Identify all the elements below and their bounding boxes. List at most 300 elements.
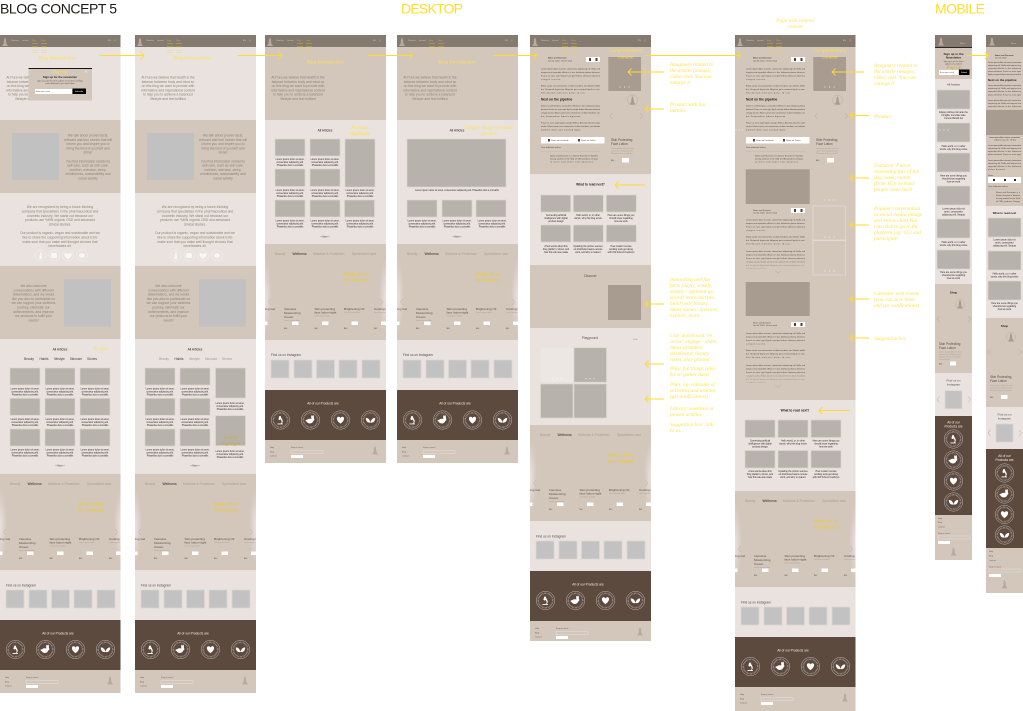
note: complementary content: Complementary [813,48,848,54]
panel: what to read next: product design [752,446,768,448]
panel: company values with social icons: Our product is organic, vegan and sustainable and we [155,231,235,235]
note: plan: Plan: my calendar of [669,381,716,388]
panel: mobile article body: Lorem ipsum dolor sit amet, consectetur [988,61,1021,64]
panel: all articles grid: consectetur adipiscing elit. [46,421,74,424]
panel: discover: Discover [584,274,598,278]
arrow: mobile 1 to 2 [967,52,988,59]
wireframe 6: article with related content: Shop [776,40,782,42]
wireframe 1: blog landing with pop up [0,35,128,693]
panel: mobile article list: Cursus blandit dui [944,117,963,120]
panel: all articles with highlights: Lorem ipsum dolor sit amet, [146,448,175,452]
wireframe 2: blog landing with highlight: lifestyle and feel fulfilled [150,97,186,101]
panel: what to read next: Updating the printer sources [573,245,603,248]
panel: all articles with product highlight: Lorem ipsum dolor sit amet, [276,189,305,192]
panel: footer: Blog [535,632,539,634]
panel: shop by category: Beauty [145,482,156,486]
wireframe 1: blog landing with pop up: EN [108,40,111,42]
wireframe 2: blog landing with highlight [128,35,263,693]
panel: shop by category: Lorem ipsum dolor [549,500,565,503]
panel: article with related content: Share on Facebook [756,140,773,142]
panel: all articles with highlights: Phasellus duis a convallis [182,425,209,427]
panel: shop by category [729,491,860,587]
panel: welcome with image: conversations with different [13,288,54,292]
panel: mobile article body: Lorem ipsum dolor sit amet, consectetur [988,159,1021,162]
panel: playground [530,328,651,425]
panel: company values with social icons: cosmetic industry. We stand out because our [162,214,229,218]
panel: mobile badges [986,449,1023,548]
panel: all articles grid: Lorem ipsum dolor sit amet, [11,388,40,390]
panel: shop by category: Moisturizing [19,541,36,545]
wireframe 3: desktop product highlight: lifestyle and feel fulfilled [280,97,316,101]
panel: about with image: nutrition, exercise, sleep, [70,168,107,172]
panel: all articles with highlights: Lorem ipsum dolor sit amet, [146,418,175,421]
panel: mobile instagram [986,407,1023,449]
panel: all articles grid: Skincare [70,357,82,361]
panel: article with related content: dui. Suspendi dignissim. Aliquam quis euismod ligula in erat. [746,88,805,91]
panel: shop by category: Lorem ipsum dolor [284,319,300,322]
panel: what to read next: Connecting artificial [750,440,771,442]
panel: shop by category: Lorem ipsum dolor [506,311,522,314]
wireframe 3: desktop product highlight: Shop [306,40,312,42]
panel: shop by category: Cooling Gel [506,307,522,311]
panel: all articles with product highlight [265,120,386,244]
panel: shop by category: $00 [580,509,583,511]
panel: newsletter pop up: Sign up for the newsletter [43,75,78,79]
wireframe 6: article with related content: Products [746,39,754,42]
panel: shop by category: Skin protecting [50,537,70,541]
panel: all articles with highlights: Phasellus duis a convallis [147,394,174,396]
panel: mobile shop: consectetur adipiscing elit. [939,353,962,356]
panel: shop by category: face lotion-night [184,540,206,544]
panel: all articles with product highlight: Phasellus duis a convallis [312,196,339,198]
note: imagery: the article (images, [670,67,711,74]
panel: shop by category: Brightening Oil [609,488,630,492]
panel: all articles with product highlight: consectetur adipiscing elit. [276,161,304,164]
note: discover: build your library. [670,301,709,307]
panel: mobile article list: Here are some things you [940,271,968,274]
panel: product values badges [735,637,856,687]
panel: all articles with product highlight: Phasellus duis a convallis [347,226,374,228]
wireframe 1: blog landing with pop up: informative and inspirational content [6,88,60,92]
panel: about with image: self-care, such as skin care, [67,164,109,168]
panel: article with related content: dictumst. Fusce ac nunc eget ligula suscipit finibus. Aenean pharetra [746,108,806,111]
panel: article with related content: Name and Surname [753,58,773,60]
panel: article body: molestie dolor, quis euismod ligula. [541,128,581,132]
panel: shop by category: Moisture & Protection [445,252,477,256]
panel: instagram: Find us on Instagram [6,584,36,588]
panel: what to read next: Hello world, or, in other [576,214,600,217]
arrow: concept 1 to 2 [100,52,144,60]
panel: shop by category: Shop all or [608,452,634,458]
panel: shop by category: face lotion-night [580,492,601,496]
panel: all articles grid: All Articles [53,348,68,352]
panel: all articles with product highlight: Highlight [348,131,370,137]
arrow: read next note 2 [819,407,850,414]
panel: shop by category: Lorem ipsum dolor [639,492,655,495]
panel: all articles grid: Lorem ipsum dolor sit amet, [46,448,75,452]
wireframe 5: article page: Shop [571,40,577,42]
note: user dashboard: room, play ground [670,357,710,363]
panel: all articles with highlights: < More > [190,464,200,468]
panel: shop by category: face lotion-night [50,540,71,544]
panel: all articles with large preview: Lorem ipsum dolor sit amet, consectetur adipiscing elit. Phasellus duis a convallis [415,189,500,192]
panel: mobile pop up: Newsletter [946,56,962,60]
arrow: concept 2 to 3 [237,52,282,60]
panel: mobile article list: Fringilla, nisl vitae vitae [941,114,966,117]
panel: shop by category: Moisturizing [549,492,566,496]
panel: article with related content: congue iaculis. [746,79,766,81]
panel: footer: Keep in touch [556,627,568,630]
panel: article with related content: tempus erat imperdiet efficitur. In hac habitasse platea dictumst. [746,254,805,256]
panel: all articles grid: consectetur adipiscing elit. [46,452,74,454]
panel: shop by category [0,474,125,570]
panel: mobile shop [986,318,1023,407]
panel: what to read next: with Old School Cowboy's [813,476,840,479]
panel: shop by category: by category [78,508,105,514]
panel: shop by category: Brightening Oil [344,307,365,311]
panel: article with related content: Next on the pipeline [746,98,777,102]
panel: mobile pop up [935,47,972,79]
panel: shop by category: face lotion-night [784,558,806,562]
panel: all articles with highlights: Lorem ipsum dolor sit amet, [216,402,245,405]
panel: footer: Help [5,677,10,679]
wireframe 2: blog landing with highlight: on this blog we want to provide with [142,84,195,88]
panel: shop by category: Beauty [745,499,756,503]
panel: article body: congue iaculis. Etiam auctor erat consectetur ut diam tincidunt, nec [541,112,600,114]
panel: product: consectetur adipiscing elit. [816,150,839,152]
panel: shop by category: by category [343,278,370,284]
note: popular conversation: Popular conversation [873,206,920,212]
panel: shop by category: Lorem ipsum dolor [344,311,360,314]
panel: mobile article list [935,79,972,284]
panel: what to read next [530,174,651,265]
note: discover: explore, learn [670,313,700,319]
panel: shop by category: Lorem ipsum dolor [19,549,35,552]
panel: about with image [0,120,120,193]
panel: company values with social icons: beneficiates all. [183,244,207,248]
panel: article with related content: Fusce ac nunc eget ligula suscipit finibus. Aenean pharetra [746,339,806,342]
note: imagery 2: Imaginery related to [873,63,918,69]
panel: footer: Keep in touch [26,676,38,679]
panel: all articles with large preview: consectetur adipiscing elit. [478,222,506,226]
panel: shop by category: Lorem ipsum dolor [580,496,596,498]
panel: shop by category: Skin protecting [446,307,467,311]
panel: article body: Etiam auctor erat consectetur ut diam tincidunt, nec lobortis mollis [541,84,600,88]
panel: mobile footer [935,515,972,560]
panel: playground: EN A [633,338,638,341]
panel: shop by category: Moisturizing [754,558,771,562]
wireframe 3: desktop product highlight: Blog Introduction [306,60,344,66]
panel: article body: tempus erat imperdiet efficitur. In hac habitasse platea dictumst. [541,71,600,74]
panel: mobile article body: Senior Scientist in Sweden [996,194,1020,197]
wireframe 8: mobile article [986,35,1023,593]
panel: article with related content: having worked in the field of CBD products, Enjoys [755,158,803,160]
panel: shop by category: $00 [844,575,847,577]
wireframe 2: blog landing with highlight: Shop [176,40,182,42]
note: discover: Ideas names: discover, [669,307,718,313]
panel: article body: iaculis. Etiam auctor erat consectetur ut diam tincidunt, nec lobortis [541,125,600,128]
panel: article body: Next on the pipeline [541,98,572,102]
panel: shop by category: Intensive [549,488,562,492]
wireframe 6: article with related content: Q [849,40,851,42]
panel: shop by category: $00 [476,328,479,330]
wireframe 3: desktop product highlight: Products [276,39,284,42]
panel: all articles with product highlight: Lorem ipsum dolor sit amet, [311,220,340,222]
panel: product values badges: All of our Products are [572,582,604,586]
panel: mobile article body: Your dedicated author: [988,185,1008,188]
panel: mobile shop: Face Lotion [939,346,956,350]
panel: shop by category [259,244,390,340]
panel: mobile footer: Keep in touch [938,532,950,535]
panel: shop by category: by category [608,458,635,464]
panel: playground: Playground [582,336,598,340]
panel: company values with social icons: company that specialises in the pharmaceutical and [22,210,98,214]
panel: mobile pop up: Sign up to the [944,52,964,56]
panel: all articles grid: Beauty [24,357,34,361]
panel: shop by category: Cream [754,562,764,566]
note: imagery 2: the article (images, [874,68,915,75]
panel: about with image: mindfulness, sustainability and [65,172,111,176]
panel: mobile instagram: Find us on [997,412,1012,416]
panel: article body: dui. Suspendisse lobortis dignissim. [541,115,581,118]
wireframe 3: desktop product highlight: balance between body and mind so [272,80,324,84]
panel: about with image: You find information related to [66,159,110,163]
wireframe 2: blog landing with highlight: Blog [167,40,171,42]
panel: shop by category: Cooling Gel [729,554,745,558]
panel: all articles with product highlight: Lorem ipsum dolor sit amet, [311,158,340,161]
panel: all articles with large preview: consectetur adipiscing elit. [443,222,471,226]
panel: instagram [265,340,386,390]
note: discover: facts (dayly, weekly, [670,282,712,289]
panel: all articles with product highlight: Lorem ipsum dolor sit amet, [311,189,340,192]
panel: article with related content [735,47,856,400]
panel: shop by category: by category [475,278,502,284]
note: featured: interesting fact of the [874,168,920,175]
panel: product: Face Lotion [816,142,833,146]
panel: all articles with highlights: consectetur adipiscing elit. [146,390,174,394]
note: library: Library: selection or [669,406,715,412]
panel: footer [265,440,386,463]
wireframe 4: desktop large preview: Q [511,40,513,42]
panel: mobile article body: platea dictumst. Fusce ac nunc eget [988,94,1021,96]
panel: shop by category: Shop all or [813,518,839,524]
panel: product: $00 [816,160,819,162]
panel: what to read next: how we work [614,220,629,223]
note: featured: Featured: Fun or [873,163,912,169]
panel: mobile footer: Contact [989,559,996,562]
note: suggestion box: Suggestion box [874,336,907,342]
panel: what to read next: blog platform, Ghost, and [747,473,774,476]
panel: article with related content: congue iaculis. Etiam auctor erat consectetur ut diam tincidunt [746,374,805,378]
wireframe 3: desktop product highlight: EN [373,40,376,42]
panel: shop by category [524,425,655,521]
panel: about with image: We talk about proven facts, [203,134,243,138]
panel: product values badges: All of our Products are [177,632,209,636]
panel: footer [735,687,856,711]
arrow: calendar note [850,296,869,302]
panel: all articles grid: consectetur adipiscing elit. [11,390,39,394]
panel: company values with social icons: clinical studies. [49,222,71,226]
panel: shop by category: $00 [314,328,318,330]
arrow: imagery note 2 [832,68,864,76]
panel: company values with social icons: We are recognized by being a future-thinking [162,205,228,209]
panel: article with related content: Fusce ac nunc eget ligula suscipit finibus. Aenean pharetra [746,74,806,78]
panel: article with related content: tempus erat imperdiet efficitur. In hac habitasse platea dictumst. [746,336,805,338]
panel: shop by category: Wellness [762,499,777,503]
panel: company values with social icons [135,193,256,266]
wireframe 1: blog landing with pop up: Blog [32,40,36,42]
arrow: concept 4 to article page [493,52,537,60]
panel: shop by category: $00 [814,575,817,577]
panel: shop by category: Moisture & Protection [183,482,215,486]
arrow: product note 2 [850,112,869,119]
panel: what to read next: how this site was made [748,476,773,479]
panel: footer: Keep in touch [761,693,773,696]
panel: mobile footer: Contact [938,526,945,528]
panel: all articles with large preview: Phasellus duis a convallis [409,226,436,228]
panel: shop by category: Skin protecting [314,307,335,311]
wireframe 4: desktop large preview: Blog [429,40,433,42]
panel: shop by category: Moisturizing [284,311,301,315]
wireframe 2: blog landing with highlight: Q [249,40,251,42]
panel: mobile article body: Share [988,175,994,177]
panel: all articles grid: Phasellus duis a convallis [47,394,74,396]
panel: what to read next: with Old School Cowboy's [608,251,635,254]
panel: welcome with image: conversations with different [148,288,189,292]
panel: mobile instagram: Find us on [946,378,961,382]
arrow: discover note [645,300,664,308]
panel: footer: Blog [402,452,406,454]
arrow: imagery note [628,68,664,76]
note: user dashboard: Ideas of names: [669,344,704,351]
arrow: read next note [615,182,645,188]
panel: all articles with highlights: Phasellus duis a convallis [147,425,174,427]
panel: what to read next: should know regarding [814,442,838,446]
panel: mobile article body: Jan 00, 2022 [995,58,1007,60]
wireframe 3: desktop product highlight: Journal [287,40,294,42]
panel: article with related content: Lorem ipsum dolor sit amet, consectetur adipiscing elit. Nulla sed [746,250,805,253]
panel: shop by category: Beauty [540,433,551,437]
panel: shop by category: Brightening Oil [476,307,497,311]
arrow: featured note [850,174,869,182]
panel: article with related content: tempus erat imperdiet efficitur. In hac habitasse platea dictumst. [746,222,805,225]
panel: all articles with product highlight: Phasellus duis a convallis [277,196,304,198]
panel: article with related content: iaculis. Etiam auctor erat consectetur ut diam tincidunt, nec lobortis [746,125,805,128]
panel: shop by category: Lorem ipsum dolor [446,314,463,318]
panel: product values badges: All of our Products are [307,402,339,406]
panel: shop by category: Cooling Gel [844,554,860,558]
panel: shop by category: Lorem ipsum dolor [50,544,66,548]
panel: all articles with highlights [135,339,256,474]
wireframe 6: article with related content [728,35,863,711]
panel: product values badges [0,620,120,670]
panel: mobile article body [986,47,1023,206]
panel: article imagery carousel [813,57,846,91]
panel: shop by category: Cooling Gel [639,488,655,492]
panel: mobile article list: how we work [947,277,961,280]
panel: mobile article list: All Articles [947,82,961,86]
panel: shop by category: face lotion-night [314,310,336,314]
wireframe 5: article page [523,35,658,641]
panel: what to read next: words, why this blog exists [779,442,808,446]
panel: shop by category: Lorem ipsum dolor [244,541,260,544]
panel: newsletter pop up: Subscribe [75,90,83,93]
panel: all articles with highlights: Lorem ipsum dolor sit amet, [181,388,210,390]
panel: all articles with product highlight: consectetur adipiscing elit. [276,192,304,195]
panel: all articles grid [0,339,120,474]
panel: article with related content: Lorem ipsum dolor sit amet, consectetur adipiscing elit. Nulla sed [746,68,805,70]
panel: all articles with highlights: Phasellus duis a convallis [217,409,244,411]
panel: mobile article body: Lorem ipsum dolor sit amet, consectetur [988,99,1021,102]
panel: all articles grid: Phasellus duis a convallis [12,394,39,396]
panel: shop by category: Beauty [407,252,418,256]
panel: newsletter pop up: Enter your email [36,90,50,93]
panel: all articles with large preview [397,120,518,244]
panel: all articles grid: Stories [87,357,97,361]
panel: all articles grid: Phasellus duis a convallis [47,456,74,458]
wireframe 8: mobile article: Menu [1011,43,1016,45]
panel: mobile footer [986,548,1023,593]
panel: shop by category: $00 [19,558,22,560]
panel: mobile badges: All of our [947,420,961,424]
panel: welcome with image: achievements, and improve [13,310,54,314]
panel: article body: dictumst. Fusce ac nunc eget ligula suscipit finibus. Aenean pharetra [541,108,601,111]
note: imagery 2: video, reel. You can [874,75,916,81]
panel: all articles grid: Lorem ipsum dolor sit amet, [81,448,110,452]
panel: all articles grid: < More > [55,464,65,468]
wireframe 6: article with related content: Journal [757,40,764,42]
panel: all articles with highlights: Phasellus duis a convallis [147,456,174,458]
panel: shop by category: Cooling Gel [129,537,145,541]
panel: mobile shop: Phasellus duis a convallis [990,390,1012,392]
panel: shop by category: Specialized care [822,499,846,503]
wireframe 3: desktop product highlight: to help you to achieve a balanced [273,93,323,97]
panel: footer: Help [270,447,275,449]
panel: shop by category: $00 [244,558,247,560]
panel: mobile article body: adipiscing elit. Nulla [994,138,1017,142]
wireframe 2: blog landing with highlight: EN [243,40,246,42]
panel: product values badges [265,390,386,440]
panel: company values with social icons: like to share the supporting information about ESG [23,236,98,240]
panel: shop by category: $00 [639,509,642,511]
panel: all articles with large preview: Phasellus duis a convallis [479,226,506,228]
panel: shop by category: Specialized care [484,252,508,256]
wireframe 5: article page: Blog [562,40,566,42]
panel: article with related content: Fusce ac nunc eget ligula suscipit finibus. Aenean pharetra quis [746,122,805,124]
panel: shop by category: Brightening Oil [814,554,835,558]
panel: welcome with image: our products to fulfill your [150,314,188,318]
panel: company values with social icons: clinical studies. [184,222,206,226]
wireframe 7: mobile landing: Menu [960,43,965,45]
panel: shop by category: $00 [609,509,612,511]
panel: all articles grid: consectetur adipiscing elit. [81,452,109,454]
wireframe 1: blog landing with pop up: Blog Introduction [38,56,76,62]
panel: what to read next: intelligence with digital [544,217,568,220]
panel: article body: Jan 00, 2022 · 00 min read [548,60,572,62]
panel: mobile article body: imperdiet efficitur. In hac habitasse [988,150,1022,153]
panel: company values with social icons: Our product is organic, vegan and sustainable and we [20,231,100,235]
panel: all articles with product highlight: Lorem ipsum dolor sit amet, [276,220,305,222]
panel: shop by category: Moisture & Protection [48,482,80,486]
panel: footer: Blog [270,452,274,454]
note: product: buttons [670,108,686,114]
panel: welcome with image: stakeholders, and we would [13,293,54,297]
panel: company values with social icons: company that specialises in the pharmaceutical and [157,210,233,214]
panel: what to read next: working tools get along [609,248,634,251]
panel: mobile article list: adipiscing elit. Nequat [942,214,965,216]
panel: all articles grid: Lorem ipsum dolor sit amet, [46,388,75,390]
panel: all articles with large preview: Lorem ipsum dolor sit amet, [478,220,507,222]
